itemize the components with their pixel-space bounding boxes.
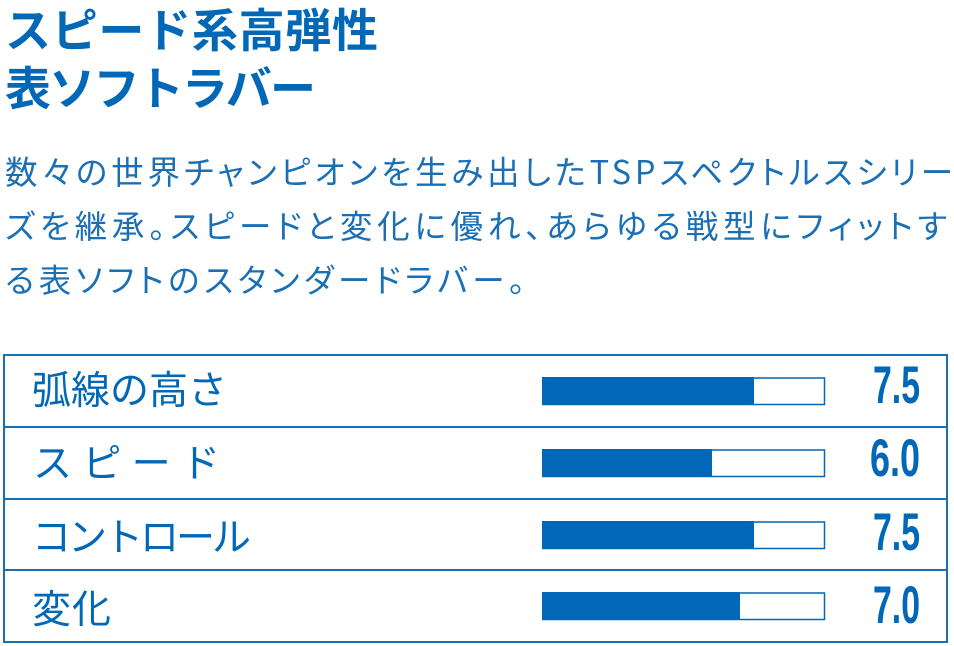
title [5, 0, 378, 119]
description text: る表ソフトのスタンダードラバー。 [5, 255, 525, 302]
description text [5, 147, 953, 302]
title: 表ソフトラバー [5, 53, 316, 119]
row: variation 7.0: 7.0 [873, 576, 920, 635]
description text: ズを継承。スピードと変化に優れ、あらゆる戦型にフィットす [5, 201, 947, 248]
row: control 7.5 [32, 503, 920, 563]
row: variation 7.0: 変化 [32, 579, 111, 635]
row: arc height 7.5: 7.5 [873, 356, 920, 415]
row: speed 6.0: スピード [33, 433, 220, 489]
row: arc height 7.5 [32, 356, 920, 416]
table frame [4, 355, 947, 642]
row: speed 6.0: 6.0 [870, 429, 920, 488]
description text: 数々の世界チャンピオンを生み出したTSPスペクトルスシリー [5, 147, 953, 194]
row: arc height 7.5: 弧線の高さ [32, 360, 227, 416]
ratings table [4, 355, 947, 642]
row: control 7.5: コントロール [32, 507, 251, 563]
row: speed 6.0 [33, 429, 920, 489]
row: variation 7.0 [32, 576, 920, 635]
row: control 7.5: 7.5 [873, 503, 920, 562]
